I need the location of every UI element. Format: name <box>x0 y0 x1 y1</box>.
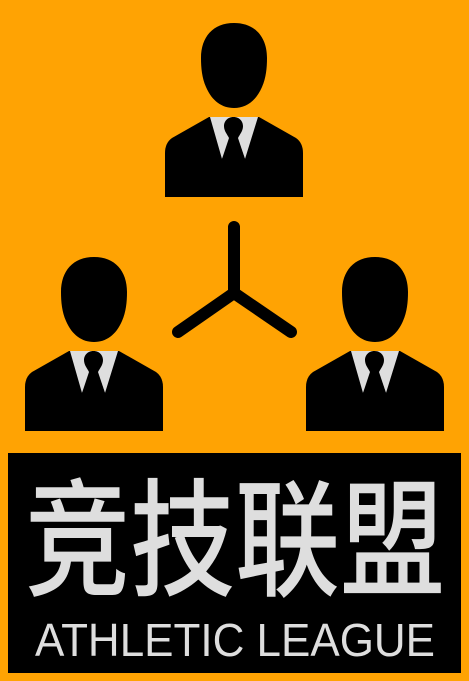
heading: Chinese name: 竞技联盟 <box>25 470 445 613</box>
icon: top person in suit <box>165 23 303 197</box>
icon: right person in suit <box>306 257 444 431</box>
panel: league name <box>8 453 461 673</box>
icon: three-way connector <box>178 227 291 332</box>
icon: left person in suit <box>25 257 163 431</box>
heading: English name: ATHLETIC LEAGUE <box>35 614 435 666</box>
